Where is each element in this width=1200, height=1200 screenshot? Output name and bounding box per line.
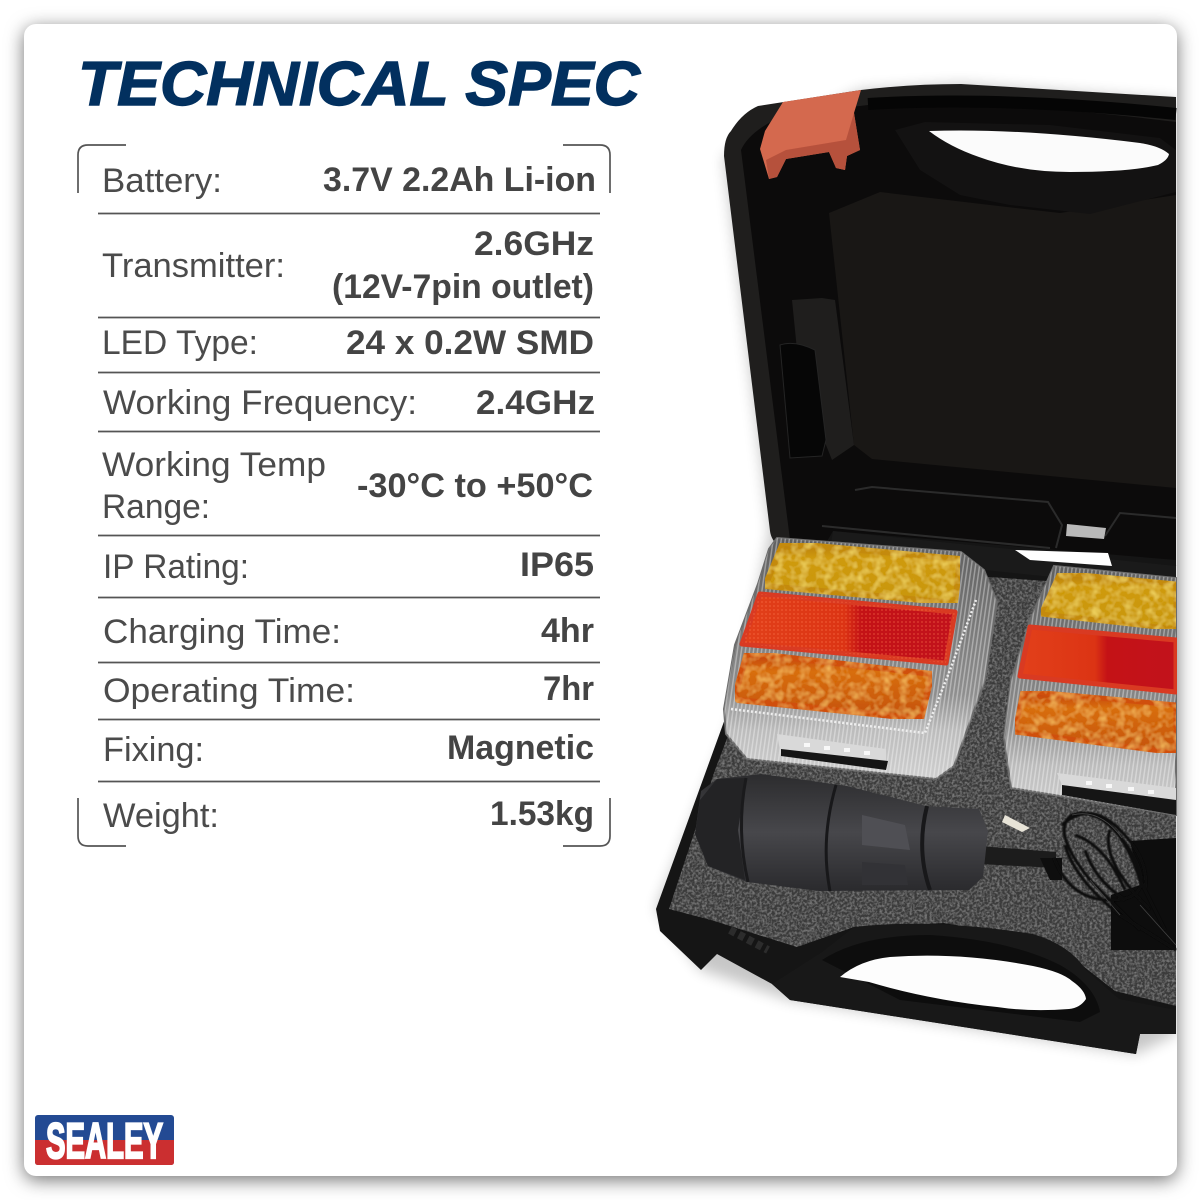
row: working frequency: Working Frequency: (103, 384, 417, 422)
row: IP rating: IP Rating: (103, 548, 249, 586)
row: operating time: 7hr (543, 670, 594, 708)
lid inner panel (829, 192, 1176, 488)
row: working temp range: -30°C to +50°C (357, 467, 593, 505)
foam insert (669, 577, 1176, 1006)
row: working frequency: 2.4GHz (476, 384, 595, 422)
row: fixing: Fixing: (103, 731, 204, 769)
lid hinge ridges (822, 487, 1176, 566)
row: weight (103, 795, 594, 835)
row: operating time: Operating Time: (103, 672, 355, 710)
hinge strip (830, 531, 1176, 590)
row: charging time: 4hr (541, 612, 594, 650)
SEALEY logo (35, 1113, 174, 1169)
row: LED type (102, 324, 594, 362)
row: fixing: Magnetic (447, 729, 594, 767)
corner brackets (78, 145, 610, 846)
row: transmitter (102, 225, 594, 306)
row: working temp range (102, 446, 593, 526)
row: battery (102, 161, 596, 200)
row: working temp range: Working Temp (102, 446, 326, 484)
row: battery: Battery: (102, 162, 222, 200)
tail light right (1004, 566, 1176, 815)
title: TECHNICAL SPEC (78, 50, 641, 119)
row: LED type: 24 x 0.2W SMD (346, 324, 594, 362)
trailer plug (695, 774, 1062, 891)
lid metal clip (1066, 524, 1106, 539)
row: IP rating (103, 546, 594, 586)
row: charging time: Charging Time: (103, 613, 341, 651)
row: IP rating: IP65 (520, 546, 594, 584)
row: weight: Weight: (103, 797, 219, 835)
row: battery: 3.7V 2.2Ah Li-ion (323, 161, 596, 199)
hinge gap (1015, 550, 1112, 566)
row: working frequency (103, 384, 595, 422)
specification table (78, 145, 610, 846)
row: weight: 1.53kg (490, 795, 594, 833)
amber lens (765, 543, 960, 603)
row: charging time (103, 612, 594, 651)
lid handle grip (895, 122, 1176, 214)
row: fixing (103, 729, 594, 769)
row: transmitter: (12V-7pin outlet) (332, 268, 594, 306)
lid left bump (780, 343, 826, 458)
work light strip (777, 734, 886, 760)
orange lens (735, 653, 932, 719)
case base (656, 531, 1176, 1054)
tail light left (724, 538, 997, 779)
case shadow (656, 84, 1176, 1054)
row: working temp range: Range: (102, 488, 210, 526)
row: LED type: LED Type: (102, 324, 258, 362)
orange latch (760, 90, 861, 179)
coiled black cables (1054, 813, 1176, 950)
lid handle opening (929, 130, 1169, 172)
red reflector (742, 594, 955, 663)
SEALEY logo: SEALEY (46, 1113, 163, 1169)
row: transmitter: 2.6GHz (474, 225, 594, 263)
base handle (772, 924, 1176, 1054)
row: operating time (103, 670, 594, 710)
case lid (724, 84, 1176, 600)
row: transmitter: Transmitter: (102, 247, 285, 285)
product photo: open carry case with lights (656, 84, 1176, 1054)
